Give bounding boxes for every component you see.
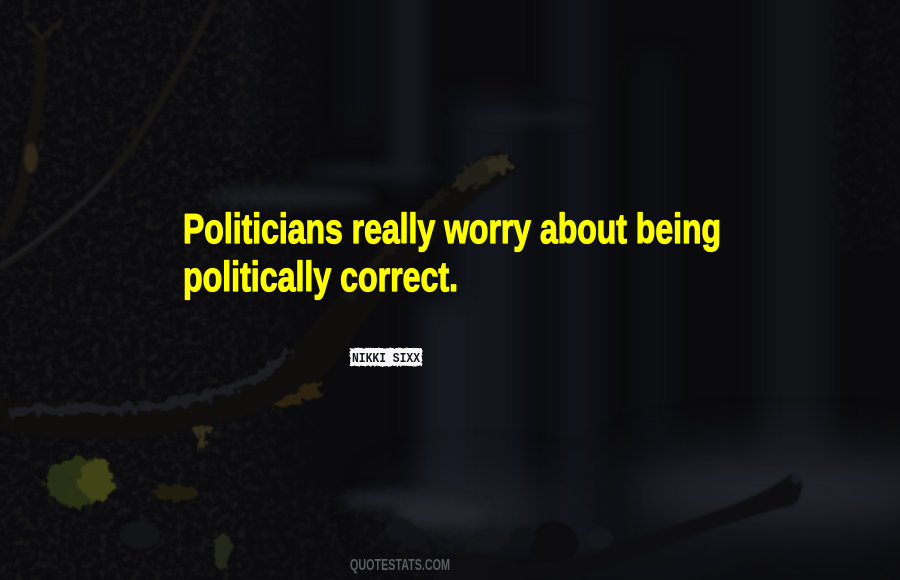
mist at pool [390, 456, 900, 580]
quote line 1: Politicians really worry about being [183, 205, 721, 252]
foliage grain [0, 0, 366, 580]
mist bands [205, 113, 590, 206]
moss patches [46, 457, 231, 570]
quote line 2: politically correct. [183, 253, 458, 300]
branch tip lichen [448, 147, 512, 197]
orange moss under branch [268, 382, 322, 408]
large fallen branch [0, 147, 520, 452]
lower right fallen branch [490, 474, 802, 580]
quote text [183, 205, 721, 300]
diagonal thin branch [0, 0, 215, 268]
waterfall light columns [236, 0, 830, 560]
watermark: quotestats.com: QUOTESTATS.COM [350, 557, 450, 574]
author tag: Nikki Sixx [350, 348, 422, 367]
rocks by the pool [120, 518, 613, 580]
author tag: Nikki Sixx: NIKKI SIXX [352, 352, 421, 367]
left thin tree trunk [0, 20, 62, 238]
